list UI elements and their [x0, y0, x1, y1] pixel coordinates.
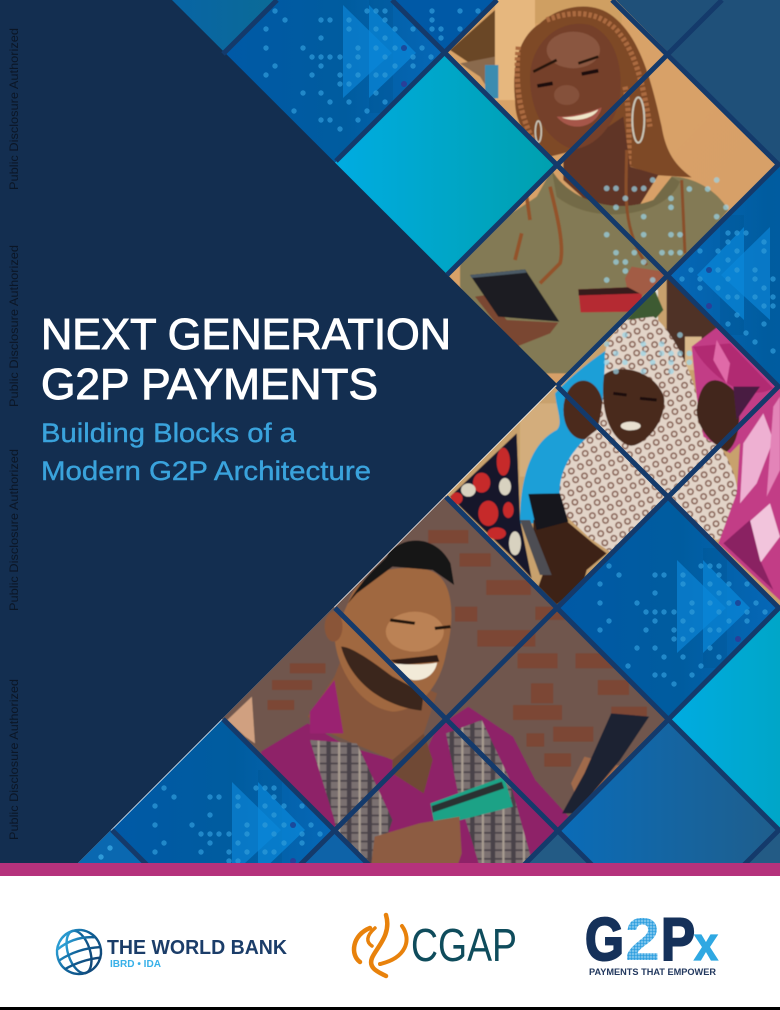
wordmark: CGAP — [411, 919, 517, 971]
lattice lines — [112, 0, 780, 865]
subtitle — [41, 418, 371, 486]
title: G2P PAYMENTS — [41, 360, 378, 409]
black bottom edge — [0, 1007, 780, 1010]
logo: G2Px — [585, 906, 718, 978]
diamond: teal lower right — [668, 608, 780, 830]
wordmark: THE WORLD BANK — [107, 936, 287, 959]
logo: The World Bank — [51, 924, 287, 980]
diamond: blue with arrows, right — [668, 164, 780, 386]
photo: man holding phone and green card — [222, 496, 665, 863]
tagline: PAYMENTS THAT EMPOWER — [589, 967, 716, 978]
triangle: bottom blue — [306, 834, 364, 863]
diamond: lower right blue — [561, 723, 776, 863]
diamond: top left blue — [172, 0, 274, 51]
letter P: P — [661, 906, 695, 973]
diamond: blue with arrows, lower right — [557, 497, 779, 719]
diamond: blue with arrows, top — [223, 0, 445, 164]
triangle: bottom left small — [78, 830, 142, 863]
photo: woman with braids holding phone and card — [440, 0, 780, 393]
navy title panel — [0, 0, 557, 864]
magenta band — [0, 863, 780, 876]
letter x: x — [694, 917, 718, 970]
diamond: teal — [334, 53, 556, 275]
icon: globe — [51, 924, 107, 980]
diamond: top right slate — [616, 0, 718, 52]
icon: orange swirl — [354, 915, 407, 976]
disclosure stamps along the left edge: Public Disclosure Authorized — [7, 28, 21, 190]
diamond: right slate — [668, 0, 780, 164]
disclosure stamps along the left edge: Public Disclosure Authorized — [7, 679, 21, 840]
subtitle: Building Blocks of a — [41, 418, 297, 448]
subtitle: Modern G2P Architecture — [41, 456, 371, 486]
triangle: bottom right slate — [750, 832, 780, 863]
title — [41, 310, 451, 409]
triangle: bottom slate — [530, 834, 586, 863]
disclosure stamps along the left edge: Public Disclosure Authorized — [7, 245, 21, 407]
logo: CGAP — [354, 915, 517, 976]
photo: three women looking at a phone — [445, 279, 780, 606]
title: NEXT GENERATION — [41, 310, 451, 359]
diamond: top centre blue — [396, 0, 498, 49]
diamond: blue with arrows, bottom left — [112, 720, 331, 863]
dotted 2: 2 — [625, 906, 660, 973]
letter G: G — [585, 906, 624, 973]
disclosure stamps along the left edge — [7, 28, 21, 840]
disclosure stamps along the left edge: Public Disclosure Authorized — [7, 449, 21, 611]
IBRD IDA: IBRD • IDA — [110, 959, 161, 970]
